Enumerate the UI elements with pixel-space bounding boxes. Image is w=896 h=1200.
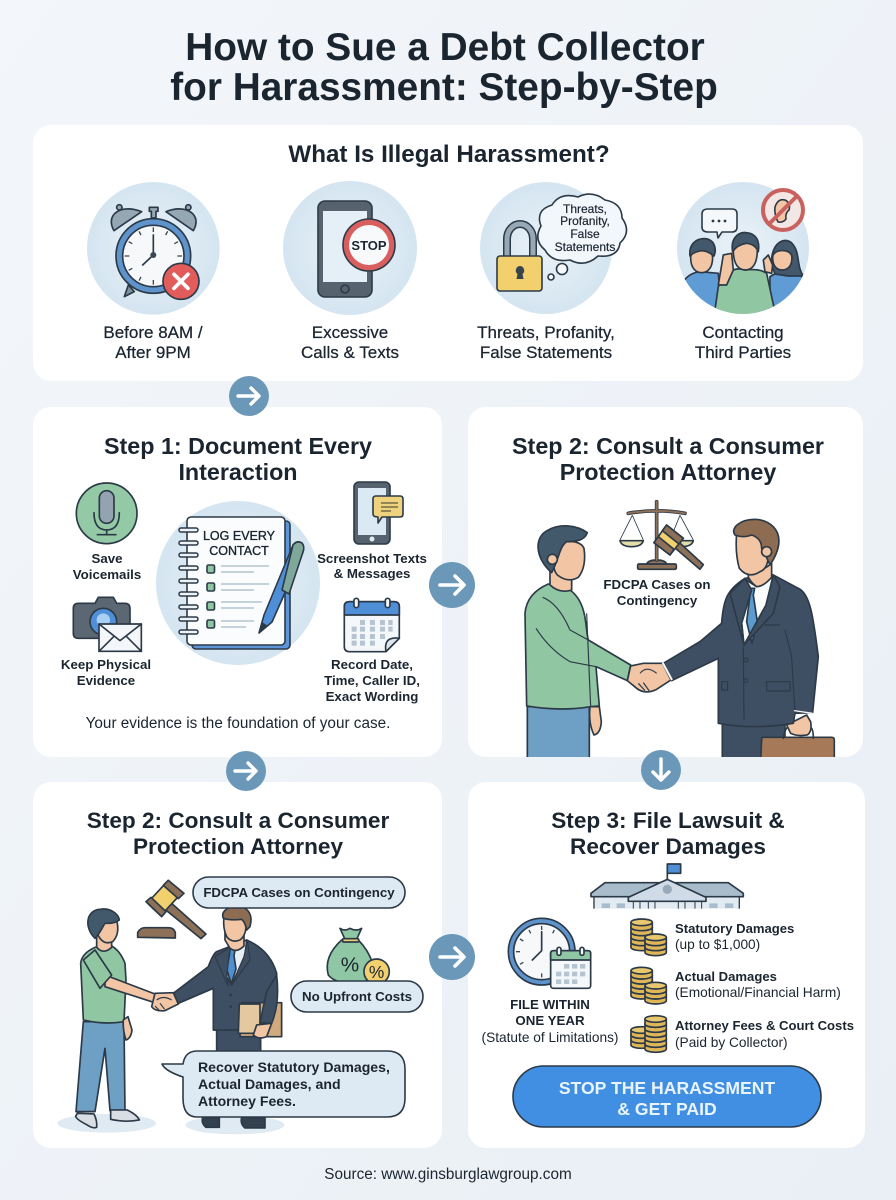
label: before 8am [103, 323, 203, 362]
arrow: to step 1 [229, 376, 269, 416]
heading: step 2 [512, 433, 824, 485]
source: Source: www.ginsburglawgroup.com [324, 1166, 572, 1183]
panel: step 3 [468, 782, 865, 1148]
icon: notebook log: CONTACT [209, 544, 269, 558]
label: excessive calls: Calls & Texts [301, 343, 399, 362]
heading: step 2 lower [87, 808, 389, 859]
text: statutory damages [675, 921, 794, 952]
pill: no upfront costs: No Upfront Costs [302, 989, 412, 1004]
panel: step 2 consult attorney [468, 407, 863, 762]
text: attorney fees: (Paid by Collector) [675, 1035, 788, 1050]
icon: calendar [344, 598, 399, 652]
icon: phone with stop sign: STOP [351, 238, 387, 253]
heading: step 1 [104, 433, 372, 485]
heading: step 2: Step 2: Consult a Consumer [512, 433, 824, 459]
heading: step 2: Protection Attorney [560, 459, 776, 485]
title: How to Sue a Debt Collector [185, 26, 705, 69]
label: screenshot texts [317, 551, 427, 581]
button: stop the harassment: & GET PAID [617, 1099, 717, 1119]
text: statutory damages: (up to $1,000) [675, 937, 760, 952]
icon: coins actual [631, 967, 666, 1004]
illustration: handshake with attorney [57, 906, 284, 1134]
icon: notebook log [156, 501, 320, 665]
heading: step 1: Step 1: Document Every [104, 433, 372, 459]
label: save voicemails: Save [91, 551, 123, 566]
text: attorney fees [675, 1018, 854, 1050]
title: for Harassment: Step-by-Step [170, 66, 718, 109]
callout: recover damages [162, 1051, 405, 1117]
icon: camera and envelope [73, 597, 141, 651]
label: file within one year: FILE WITHIN [510, 997, 590, 1012]
label: third parties: Third Parties [695, 343, 791, 362]
icon: people whispering [677, 182, 809, 317]
panel: step 2 lower [33, 782, 442, 1148]
callout: recover damages: Recover Statutory Damages, [198, 1059, 390, 1075]
text: actual damages [675, 969, 841, 1000]
button: stop the harassment: STOP THE HARASSMENT [559, 1078, 775, 1098]
label: keep physical evidence: Keep Physical [61, 657, 151, 672]
label: threats [477, 323, 615, 362]
label: record date: Exact Wording [326, 689, 418, 704]
icon: alarm clock [87, 182, 220, 315]
icon: gavel [138, 880, 206, 939]
icon: phone with stop sign [283, 181, 417, 315]
label: record date: Record Date, [331, 657, 413, 672]
panel: step 1 [33, 407, 442, 757]
label: keep physical evidence: Evidence [77, 673, 135, 688]
label: fdcpa contingency: Contingency [617, 593, 698, 608]
label: save voicemails [73, 551, 141, 582]
icon: coins statutory [631, 919, 666, 956]
label: save voicemails: Voicemails [73, 567, 141, 582]
icon: phone with message [354, 482, 403, 544]
arrow: down to step 3 [641, 750, 681, 790]
icon: coins attorney fees [631, 1016, 666, 1052]
text: actual damages: Actual Damages [675, 969, 777, 984]
heading: step 3 [551, 808, 785, 859]
bubble: fdcpa contingency: FDCPA Cases on Contingency [203, 885, 395, 900]
label: file within one year: ONE YEAR [515, 1013, 585, 1028]
pill: no upfront costs [291, 981, 423, 1012]
icon: money bag: % [369, 962, 384, 982]
label: record date [324, 657, 420, 704]
callout: recover damages: Attorney Fees. [198, 1093, 296, 1109]
icon: clock and calendar [508, 918, 591, 988]
label: record date: Time, Caller ID, [324, 673, 420, 688]
bubble: fdcpa contingency [193, 877, 405, 908]
icon: padlock with thought cloud: Profanity, [560, 214, 610, 228]
label: excessive calls [301, 323, 399, 362]
label: third parties [695, 323, 791, 362]
label: fdcpa contingency: FDCPA Cases on [603, 577, 711, 592]
label: excessive calls: Excessive [312, 323, 388, 342]
icon: padlock with thought cloud: Threats, [563, 202, 607, 216]
heading: step 2 lower: Protection Attorney [133, 834, 343, 859]
label: keep physical evidence [61, 657, 151, 688]
label: file within one year: (Statute of Limitations) [482, 1030, 618, 1045]
heading: step 3: Step 3: File Lawsuit & [551, 808, 785, 833]
label: fdcpa contingency [603, 577, 711, 608]
panel: what is illegal harassment [33, 125, 863, 381]
label: file within one year [482, 997, 618, 1045]
icon: money bag [327, 928, 389, 984]
icon: padlock with thought cloud [480, 182, 627, 314]
icon: courthouse [591, 864, 743, 909]
illustration: client and attorney handshake [525, 519, 834, 762]
label: before 8am: Before 8AM / [103, 323, 203, 342]
label: threats: False Statements [480, 343, 612, 362]
button: stop the harassment [513, 1066, 821, 1127]
label: threats: Threats, Profanity, [477, 323, 615, 342]
caption: evidence: Your evidence is the foundation of your case. [86, 715, 390, 732]
text: statutory damages: Statutory Damages [675, 921, 794, 936]
callout: recover damages: Actual Damages, and [198, 1076, 341, 1092]
icon: scales and gavel [620, 502, 703, 569]
label: third parties: Contacting [702, 323, 784, 342]
text: actual damages: (Emotional/Financial Harm) [675, 985, 841, 1000]
arrow: to lower step 2 [226, 751, 266, 791]
heading: step 2 lower: Step 2: Consult a Consumer [87, 808, 389, 833]
icon: notebook log: LOG EVERY [203, 529, 276, 543]
heading: what is illegal harassment: What Is Illegal Harassment? [288, 141, 610, 168]
label: before 8am: After 9PM [115, 343, 191, 362]
icon: padlock with thought cloud: Statements [555, 240, 615, 254]
label: screenshot texts: Screenshot Texts [317, 551, 427, 566]
icon: microphone [76, 483, 137, 544]
text: attorney fees: Attorney Fees & Court Costs [675, 1018, 854, 1033]
heading: step 3: Recover Damages [570, 834, 766, 859]
arrow: to step 3 [429, 934, 475, 980]
label: screenshot texts: & Messages [334, 566, 410, 581]
icon: money bag: % [341, 954, 359, 977]
icon: padlock with thought cloud: False [570, 227, 600, 241]
arrow: to step 2 [429, 562, 475, 608]
heading: step 1: Interaction [178, 459, 298, 485]
title [170, 26, 718, 109]
